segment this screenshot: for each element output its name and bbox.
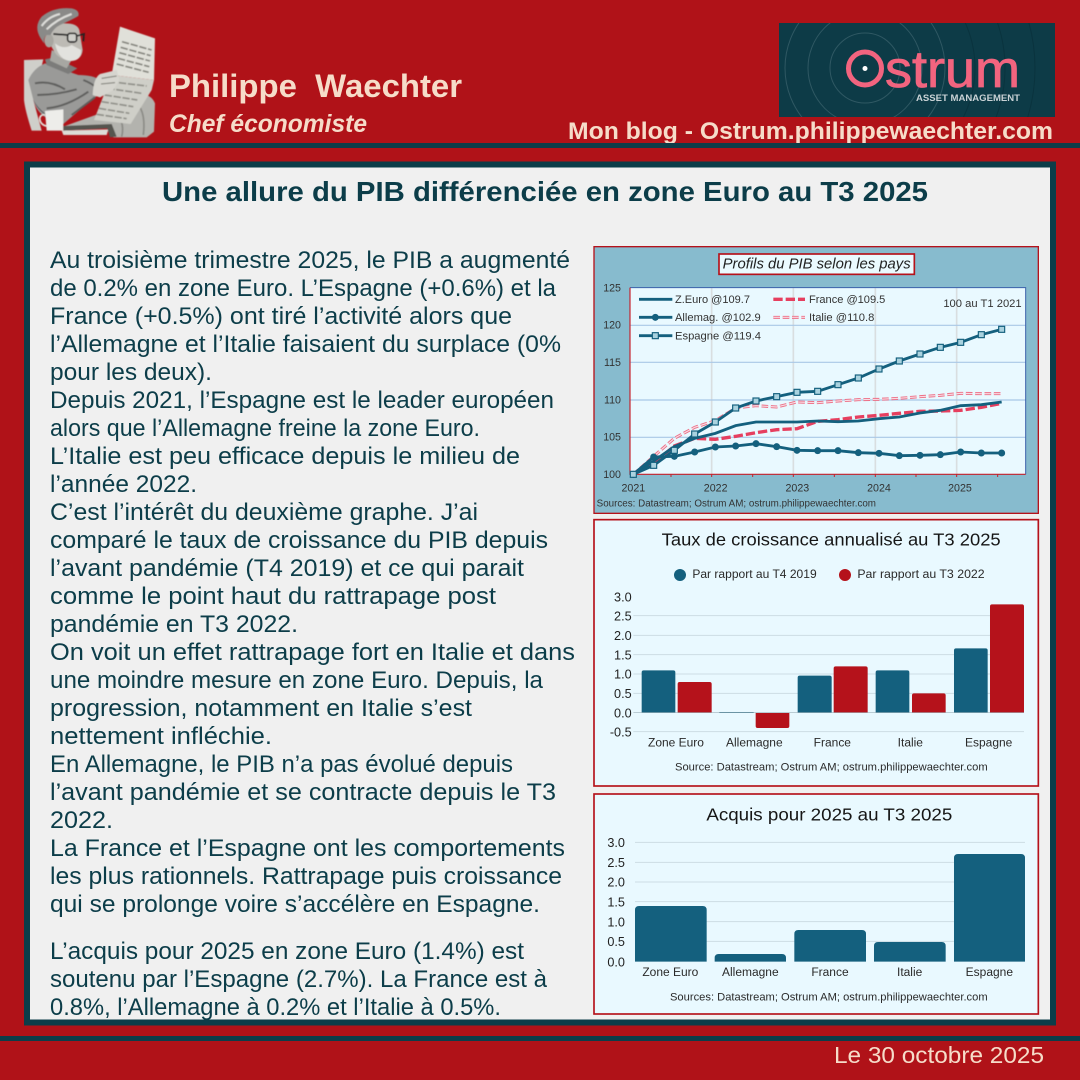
text block: commentary: France (+0.5%) ont tiré l’activité alors que (50, 303, 512, 330)
lap and legs (65, 94, 155, 137)
panel: carry-over growth bar chart (594, 794, 1038, 1014)
logo: Ostrum: ASSET MANAGEMENT (916, 93, 1020, 104)
y axis labels: 1.5 (614, 648, 632, 662)
panel: line chart of GDP profiles (594, 247, 1038, 513)
y axis labels: 105 (603, 432, 621, 444)
x axis labels: 2024 (867, 483, 891, 495)
y axis labels: 125 (603, 282, 621, 294)
legend (639, 294, 885, 342)
text block: commentary: une moindre mesure en zone Euro. Depuis, la (50, 667, 544, 694)
text block: commentary: C’est l’intérêt du deuxième graphe. J’ai (50, 499, 478, 526)
face (49, 23, 83, 61)
y axis labels: 0.0 (614, 706, 632, 720)
category labels (642, 965, 1013, 979)
job title: Chef économiste (169, 110, 367, 138)
y axis labels: -0.5 (610, 725, 632, 739)
grid lines (633, 616, 1024, 732)
text block: commentary: 2022. (50, 807, 113, 834)
y axis labels: 1.0 (614, 668, 632, 682)
x axis labels: 2025 (948, 483, 972, 495)
text block: commentary: pour les deux). (50, 359, 212, 386)
y axis labels (610, 590, 632, 739)
header rule (0, 143, 1080, 148)
text block: commentary (50, 247, 575, 1021)
neck (50, 50, 72, 68)
plot area (630, 288, 1026, 474)
text block: commentary: comme le point haut du rattrapage post (50, 583, 496, 610)
y axis labels: 0.5 (614, 687, 632, 701)
date: Le 30 octobre 2025 (834, 1042, 1044, 1068)
source: Sources: Datastream; Ostrum AM; ostrum.philippewaechter.com (597, 499, 876, 510)
source: Sources: Datastream; Ostrum AM; ostrum.philippewaechter.com (670, 992, 988, 1004)
text block: commentary: l’avant pandémie et se contracte depuis le T3 (50, 779, 556, 806)
text block: commentary: l’Allemagne et l’Italie faisaient du surplace (0% (50, 331, 561, 358)
bars: T4 2019 (642, 648, 988, 713)
bars: T3 2022 (678, 604, 1024, 728)
text block: commentary: L’acquis pour 2025 en zone Euro (1.4%) est (50, 938, 524, 965)
chair back (24, 59, 43, 131)
mug (45, 109, 63, 131)
y axis labels: 0.5 (607, 935, 625, 949)
series: France (633, 403, 1002, 474)
grid lines (635, 842, 1025, 941)
collar (45, 57, 77, 74)
text block: commentary: qui se prolonge voire s’accélère en Espagne. (50, 891, 540, 918)
category labels: France (811, 965, 849, 979)
y axis labels (607, 836, 625, 969)
y axis labels: 120 (603, 320, 621, 332)
text block: commentary: 0.8%, l’Allemagne à 0.2% et l’Italie à 0.5%. (50, 994, 501, 1021)
hand (93, 70, 119, 97)
legend: France @109.5 (809, 294, 885, 306)
text block: commentary: L’Italie est peu efficace depuis le milieu de (50, 443, 520, 470)
category labels (648, 736, 1013, 750)
y axis labels: 115 (604, 357, 621, 369)
icon: portrait of man reading a newspaper (24, 8, 155, 137)
hair (37, 8, 79, 43)
y axis labels: 2.5 (607, 856, 625, 870)
legend: Par rapport au T3 2022 (857, 568, 985, 581)
y axis labels: 3.0 (607, 836, 625, 850)
text block: commentary: de 0.2% en zone Euro. L’Espagne (+0.6%) et la (50, 275, 557, 302)
legend: Par rapport au T4 2019 (692, 568, 817, 581)
title: Une allure du PIB différenciée en zone Euro au T3 2025 (162, 176, 928, 207)
text block: commentary: En Allemagne, le PIB n’a pas évolué depuis (50, 751, 513, 778)
text block: commentary: progression, notamment en Italie s’est (50, 695, 472, 722)
y axis labels: 1.0 (607, 915, 625, 929)
legend: Espagne @119.4 (675, 330, 761, 342)
chart title: Profils du PIB selon les pays (723, 257, 911, 273)
bars (635, 854, 1025, 962)
category labels: Allemagne (726, 736, 783, 750)
text block: commentary: La France et l’Espagne ont les comportements (50, 835, 565, 862)
text block: commentary: pandémie en T3 2022. (50, 611, 298, 638)
y axis labels: 100 (603, 469, 621, 481)
legend: Z.Euro @109.7 (675, 294, 750, 306)
series: Zone Euro (633, 402, 1002, 474)
category labels: Italie (897, 965, 923, 979)
y axis labels: 0.0 (607, 955, 625, 969)
y axis labels: 1.5 (607, 895, 625, 909)
series: Italie (633, 393, 1002, 474)
legend: Allemag. @102.9 (675, 312, 761, 324)
logo: Ostrum (779, 23, 1055, 117)
legend (674, 568, 985, 581)
series: Allemagne (633, 444, 1002, 474)
header (0, 8, 1080, 148)
category labels: Espagne (966, 965, 1013, 979)
chart title: Taux de croissance annualisé au T3 2025 (662, 530, 1001, 550)
text block: commentary: l’année 2022. (50, 471, 197, 498)
name: Philippe Waechter (169, 68, 462, 104)
y axis labels: 2.0 (607, 876, 625, 890)
chair arm (62, 129, 108, 135)
text block: commentary: Depuis 2021, l’Espagne est le leader européen (50, 387, 554, 414)
text block: commentary: l’avant pandémie (T4 2019) et ce qui parait (50, 555, 524, 582)
x axis labels (621, 483, 972, 495)
panel: main content (27, 164, 1053, 1022)
y axis labels: 3.0 (614, 590, 632, 604)
text block: commentary: On voit un effet rattrapage fort en Italie et dans (50, 639, 575, 666)
text block: commentary: comparé le taux de croissance du PIB depuis (50, 527, 548, 554)
beard (55, 43, 81, 61)
y axis labels: 2.5 (614, 609, 632, 623)
y axis labels: 110 (604, 394, 621, 406)
y axis labels (603, 282, 621, 481)
category labels: France (814, 736, 851, 750)
logo: Ostrum: strum (885, 41, 1020, 99)
category labels: Zone Euro (648, 736, 704, 750)
blog link: Mon blog - Ostrum.philippewaechter.com (568, 118, 1053, 145)
category labels: Allemagne (722, 965, 779, 979)
x axis labels: 2023 (785, 483, 809, 495)
x axis labels: 2022 (704, 483, 728, 495)
ear (44, 34, 54, 47)
text block: commentary: alors que l’Allemagne freine la zone Euro. (50, 415, 480, 442)
source: Source: Datastream; Ostrum AM; ostrum.philippewaechter.com (675, 762, 988, 774)
legend: Italie @110.8 (809, 312, 874, 324)
glasses (53, 31, 68, 37)
text block: commentary: soutenu par l’Espagne (2.7%). La France est à (50, 966, 548, 993)
panel: annualised growth bar chart (594, 520, 1038, 786)
text block: commentary: Au troisième trimestre 2025, le PIB a augmenté (50, 247, 570, 274)
newspaper (112, 27, 155, 80)
sweater (28, 63, 108, 124)
text block: commentary: les plus rationnels. Rattrapage puis croissance (50, 863, 562, 890)
category labels: Italie (898, 736, 923, 750)
base note: 100 au T1 2021 (943, 298, 1022, 310)
y axis labels: 2.0 (614, 629, 632, 643)
series: Espagne (633, 329, 1002, 474)
footer (0, 1036, 1080, 1068)
category labels: Zone Euro (642, 965, 699, 979)
category labels: Espagne (965, 736, 1013, 750)
x axis labels: 2021 (621, 483, 645, 495)
text block: commentary: nettement infléchie. (50, 723, 272, 750)
chart title: Acquis pour 2025 au T3 2025 (706, 804, 952, 824)
